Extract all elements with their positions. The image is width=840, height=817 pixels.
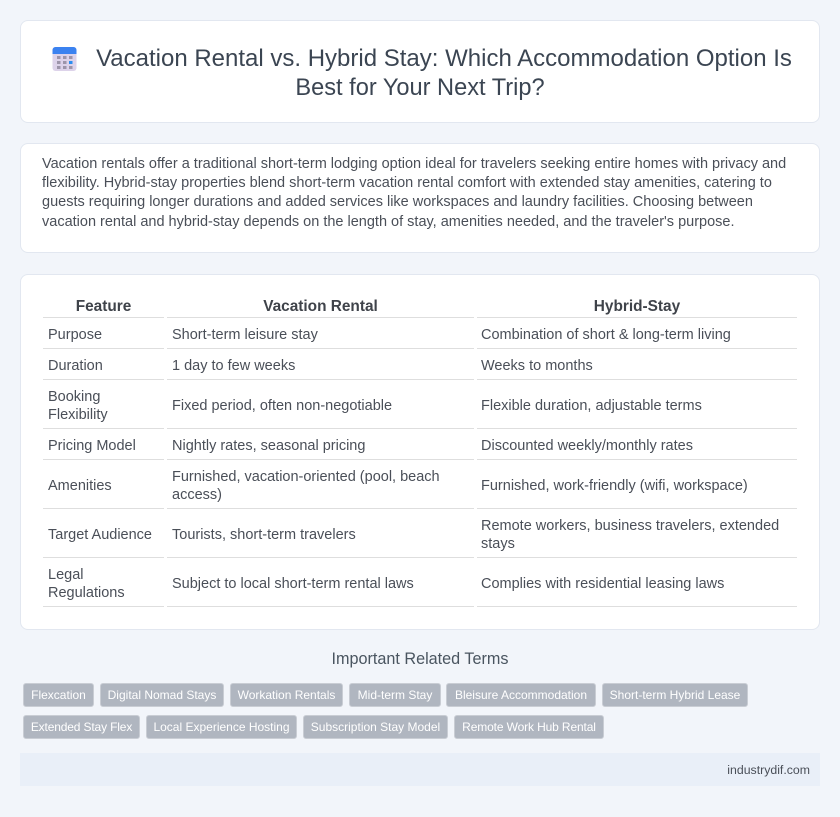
panel: comparison table: [20, 274, 820, 630]
tag list: related terms: Bleisure Accommodation: [455, 688, 587, 702]
comparison table: Remote workers, business travelers, extended stays: [481, 518, 779, 552]
comparison table: Fixed period, often non-negotiable: [172, 398, 392, 414]
comparison table: Legal Regulations: [48, 567, 125, 601]
comparison table: Amenities: [48, 478, 112, 494]
panel: introduction: [20, 143, 820, 253]
comparison table: Vacation Rental: [263, 298, 378, 314]
text block: introduction: guests requiring longer durations and added services like workspaces and laundry facilities. Choosing between: [42, 194, 753, 210]
comparison table: 1 day to few weeks: [172, 358, 295, 374]
comparison table: Nightly rates, seasonal pricing: [172, 438, 365, 454]
title: Vacation Rental vs. Hybrid Stay: Which Accommodation Option Is: [96, 45, 792, 72]
comparison table: [43, 298, 797, 607]
tag list: related terms: Remote Work Hub Rental: [462, 720, 596, 734]
comparison table: Flexible duration, adjustable terms: [481, 398, 702, 414]
comparison table: Tourists, short-term travelers: [172, 527, 356, 543]
comparison table: Booking Flexibility: [48, 389, 108, 423]
tag list: related terms: Flexcation: [31, 688, 86, 702]
tag list: related terms: [23, 683, 748, 739]
comparison table: Hybrid-Stay: [594, 298, 680, 314]
text block: introduction: vacation rental and hybrid-stay depends on the length of stay, amenities needed, and the traveler's purpose.: [42, 214, 734, 230]
comparison table: Furnished, vacation-oriented (pool, beach access): [172, 469, 440, 503]
comparison table: Target Audience: [48, 527, 152, 543]
title: [96, 45, 792, 101]
tag list: related terms: Local Experience Hosting: [153, 720, 290, 734]
text block: introduction: [42, 156, 786, 230]
tag list: related terms: Mid-term Stay: [358, 688, 432, 702]
icon: calendar: [52, 47, 76, 71]
comparison table: Pricing Model: [48, 438, 136, 454]
comparison table: Furnished, work-friendly (wifi, workspace): [481, 478, 748, 494]
text block: introduction: flexibility. Hybrid-stay properties blend short-term vacation rental comfort with extended stay amenities, catering to: [42, 175, 772, 191]
comparison table: Feature: [76, 298, 131, 314]
title: Best for Your Next Trip?: [295, 75, 545, 101]
panel: title card: [20, 20, 820, 123]
text block: introduction: Vacation rentals offer a traditional short-term lodging option ideal for travelers seeking entire homes with privacy and: [42, 156, 786, 172]
tag list: related terms: Subscription Stay Model: [311, 720, 440, 734]
tag list: related terms: Workation Rentals: [238, 688, 335, 702]
tag list: related terms: Digital Nomad Stays: [108, 688, 216, 702]
comparison table: Subject to local short-term rental laws: [172, 576, 414, 592]
comparison table: Combination of short & long-term living: [481, 327, 731, 343]
comparison table: Weeks to months: [481, 358, 593, 374]
comparison table: Complies with residential leasing laws: [481, 576, 724, 592]
tag list: related terms: Extended Stay Flex: [31, 720, 132, 734]
heading: related terms: Important Related Terms: [332, 650, 508, 668]
footer credit: industrydif.com: [727, 763, 810, 777]
comparison table: Discounted weekly/monthly rates: [481, 438, 693, 454]
footer: [20, 753, 820, 786]
tag list: related terms: Short-term Hybrid Lease: [610, 688, 740, 702]
comparison table: Duration: [48, 358, 103, 374]
comparison table: Purpose: [48, 327, 102, 343]
comparison table: Short-term leisure stay: [172, 327, 318, 343]
